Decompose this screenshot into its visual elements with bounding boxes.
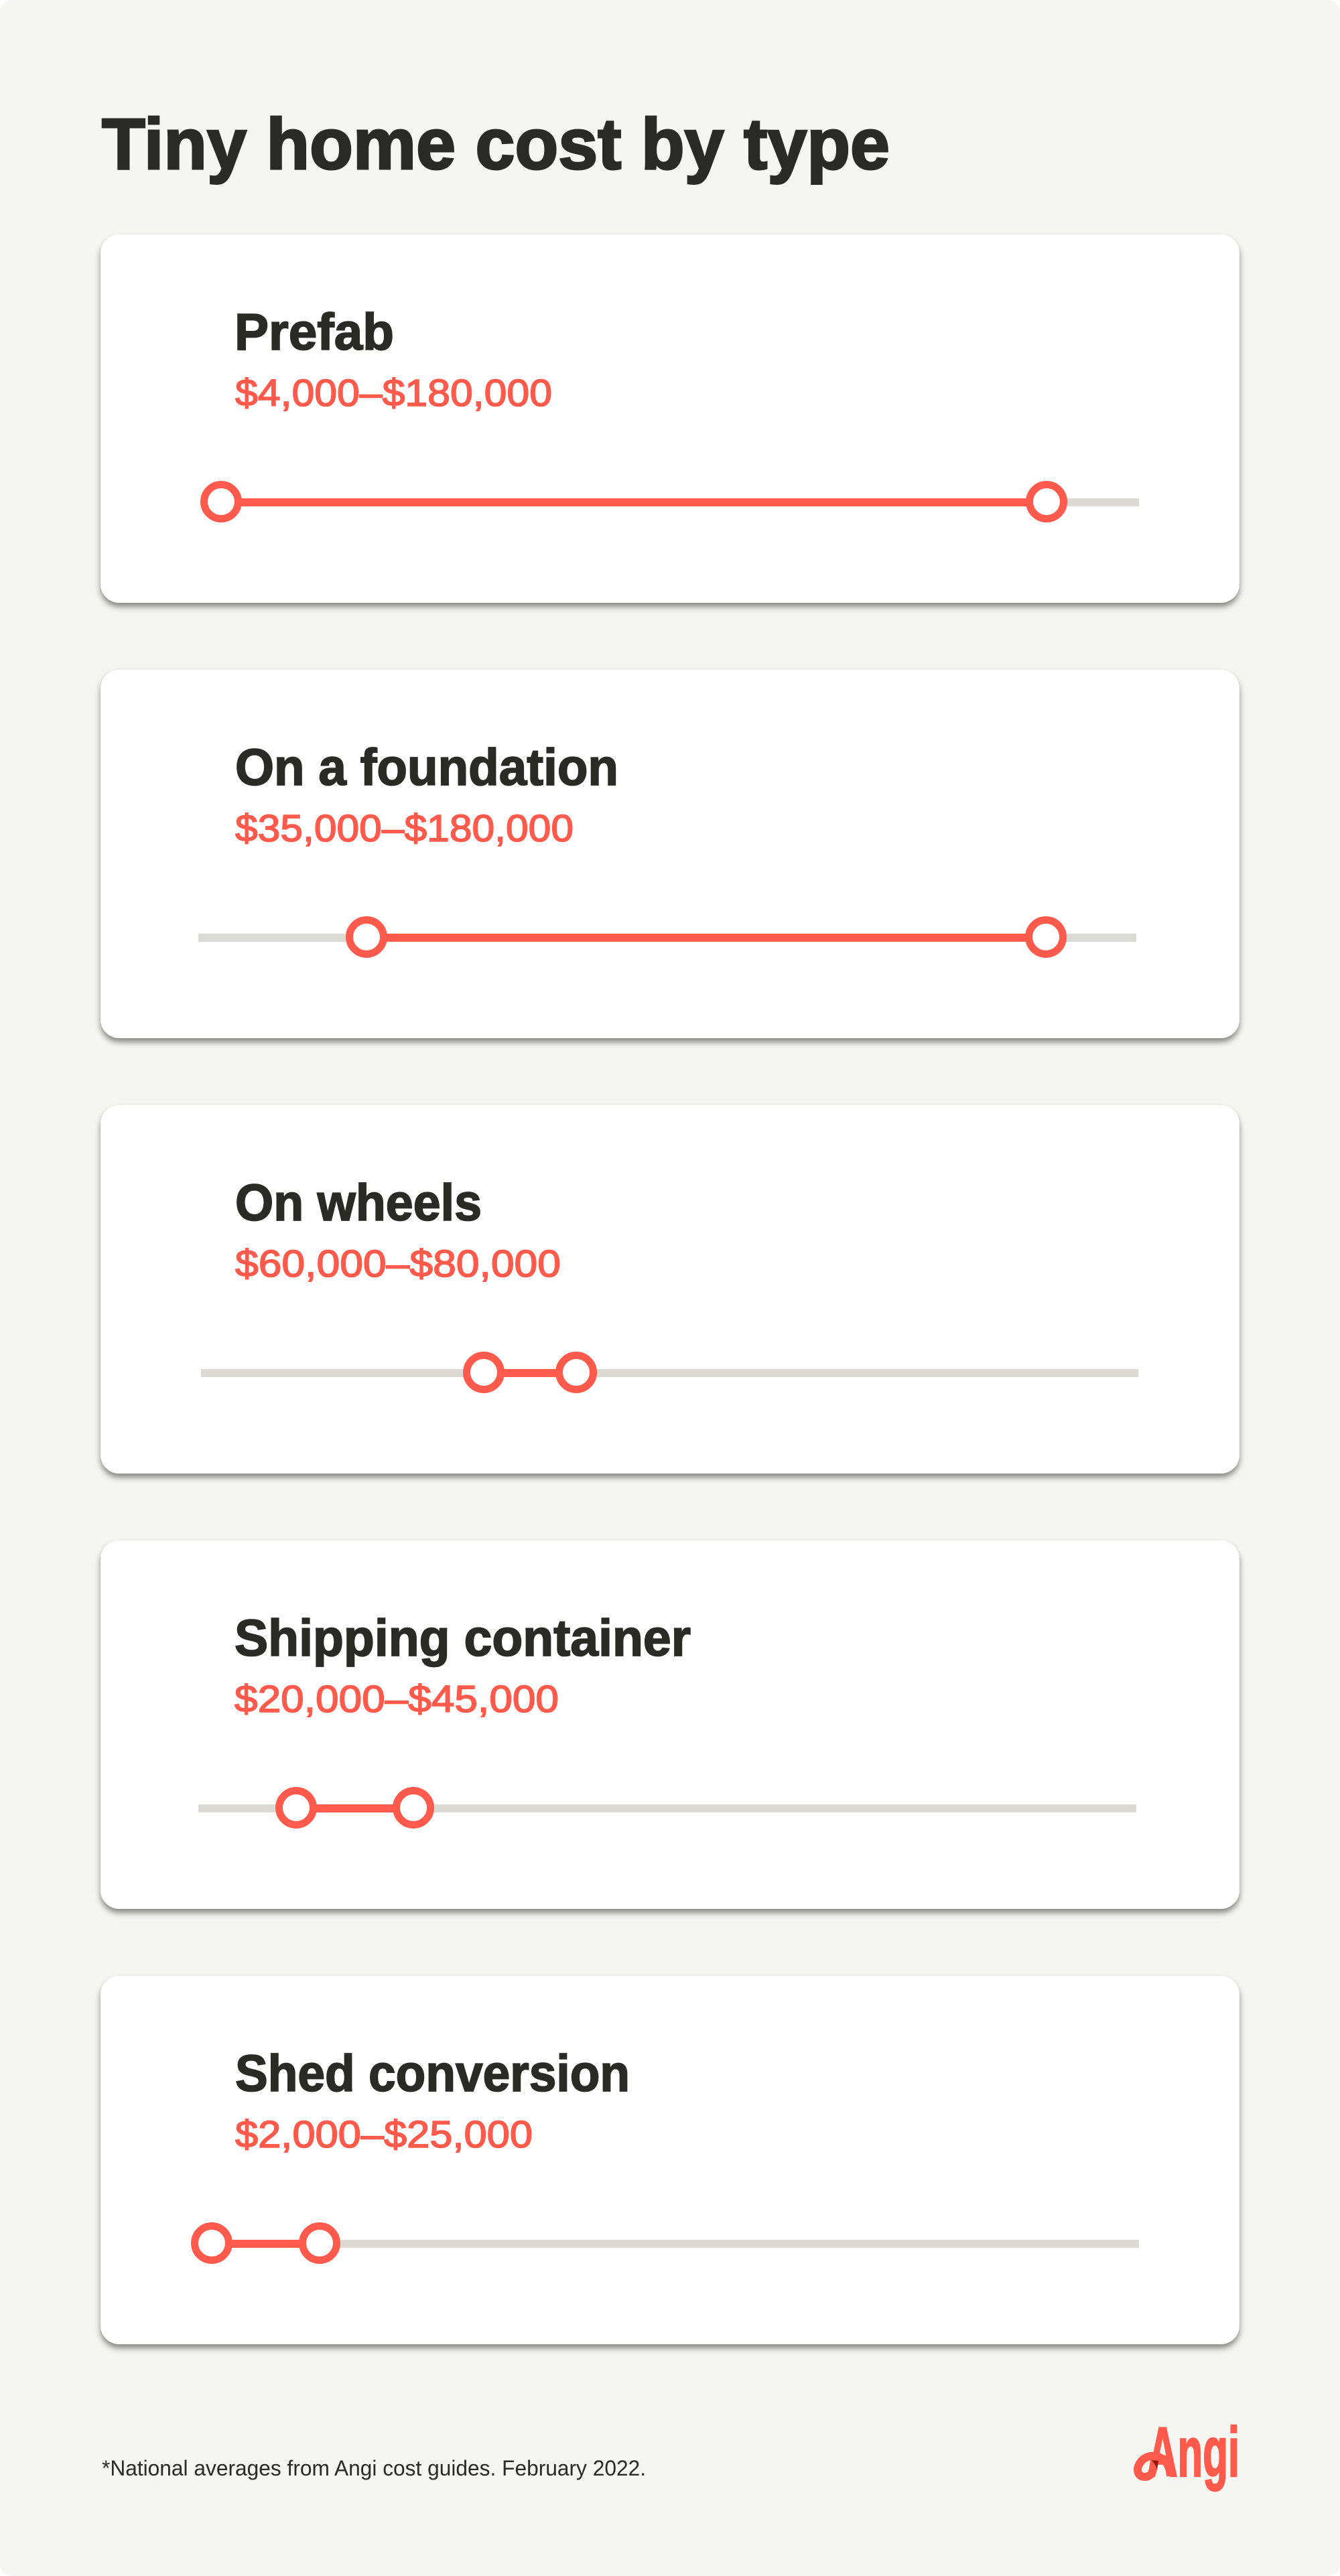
card background <box>100 670 1240 1038</box>
heading: on a foundation: On a foundation <box>235 739 618 796</box>
heading: prefab: Prefab <box>234 303 394 361</box>
price range: shipping container: $20,000–$45,000 <box>234 1678 559 1721</box>
price range: on a foundation: $35,000–$180,000 <box>235 807 574 850</box>
card background <box>100 234 1240 603</box>
range slider: prefab <box>204 485 1139 518</box>
panel: on a foundation <box>100 670 1240 1038</box>
logo: Angi <box>1138 2413 1240 2492</box>
heading: on wheels: On wheels <box>235 1174 482 1232</box>
panel: on wheels <box>100 1105 1240 1474</box>
footnote: *National averages from Angi cost guides. February 2022. <box>102 2456 646 2480</box>
title: Tiny home cost by type <box>102 103 890 184</box>
card background <box>100 1105 1240 1474</box>
price range: on wheels: $60,000–$80,000 <box>235 1242 561 1285</box>
heading: shed conversion: Shed conversion <box>235 2045 630 2102</box>
logo: Angi: Angi <box>1148 2413 1240 2492</box>
panel: shed conversion <box>100 1976 1240 2344</box>
range slider: on wheels <box>201 1356 1138 1389</box>
card background <box>100 1541 1240 1909</box>
card background <box>100 1976 1240 2344</box>
range slider: shipping container <box>198 1791 1136 1824</box>
price range: prefab: $4,000–$180,000 <box>235 372 552 415</box>
range slider: on a foundation <box>198 920 1136 954</box>
panel: prefab <box>100 234 1240 603</box>
panel: shipping container <box>100 1541 1240 1909</box>
range slider: shed conversion <box>194 2226 1139 2260</box>
heading: shipping container: Shipping container <box>234 1609 691 1667</box>
price range: shed conversion: $2,000–$25,000 <box>235 2113 533 2156</box>
